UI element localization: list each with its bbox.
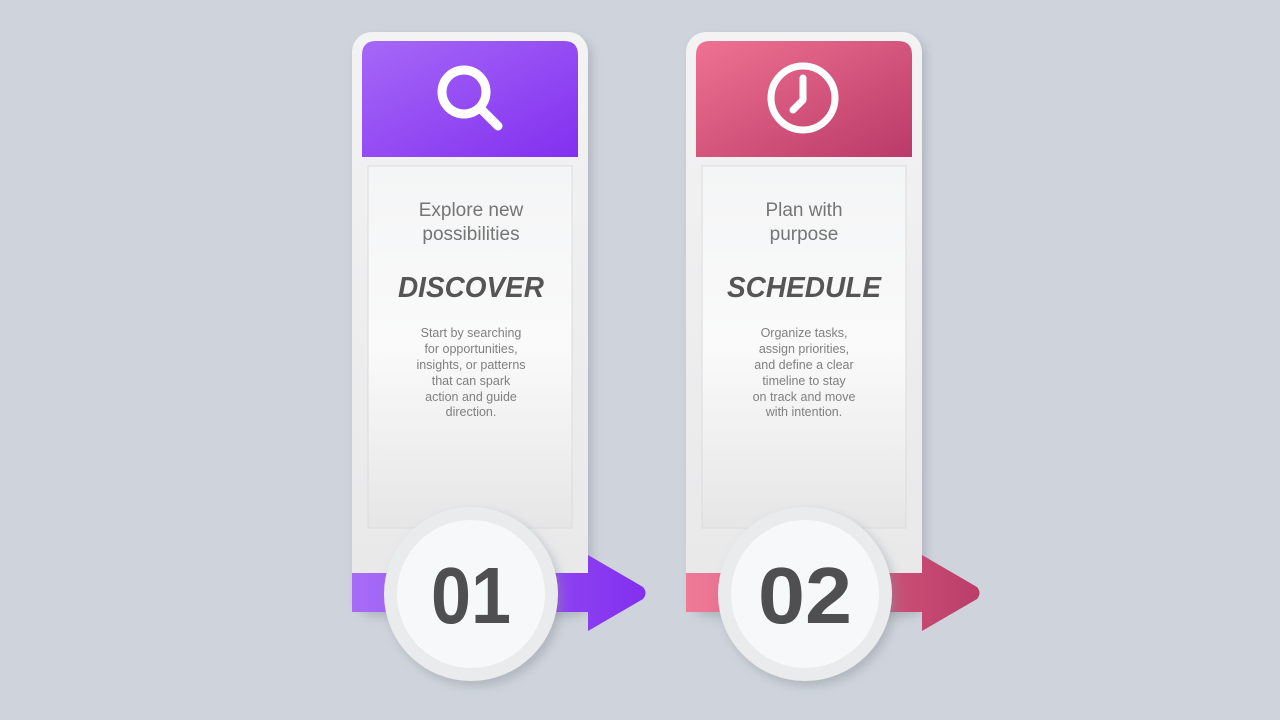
number badge 01: 01 xyxy=(431,551,511,640)
description: Organize tasks, xyxy=(761,326,847,340)
number badge 02: 02 xyxy=(758,551,852,640)
arrow xyxy=(686,555,980,631)
inner panel xyxy=(368,166,572,528)
card body xyxy=(352,32,588,612)
description xyxy=(753,326,855,419)
number badge 02 xyxy=(718,507,892,681)
icon: clock xyxy=(771,66,835,130)
number badge 01 xyxy=(384,507,558,681)
card 1: discover xyxy=(352,32,646,681)
description: timeline to stay xyxy=(762,374,846,388)
arrow xyxy=(352,555,646,631)
inner panel xyxy=(702,166,906,528)
heading: DISCOVER xyxy=(398,272,544,304)
description: that can spark xyxy=(432,374,511,388)
header: purple xyxy=(362,41,578,157)
description: for opportunities, xyxy=(424,342,518,356)
subtitle: Explore new xyxy=(419,200,524,221)
card 1: discover: possibilities xyxy=(422,224,520,245)
card 2: schedule xyxy=(686,32,980,681)
description: and define a clear xyxy=(754,358,854,372)
description: with intention. xyxy=(765,405,842,419)
description xyxy=(416,326,526,419)
description: assign priorities, xyxy=(759,342,849,356)
description: on track and move xyxy=(753,390,855,404)
description: direction. xyxy=(446,405,496,419)
description: action and guide xyxy=(425,390,517,404)
description: Start by searching xyxy=(421,326,521,340)
icon: magnifier xyxy=(442,70,498,126)
header: pink xyxy=(696,41,912,157)
subtitle: Plan with xyxy=(765,200,843,221)
card body xyxy=(686,32,922,612)
description: insights, or patterns xyxy=(416,358,526,372)
card 2: schedule: purpose xyxy=(770,224,838,245)
heading: SCHEDULE xyxy=(727,272,883,304)
